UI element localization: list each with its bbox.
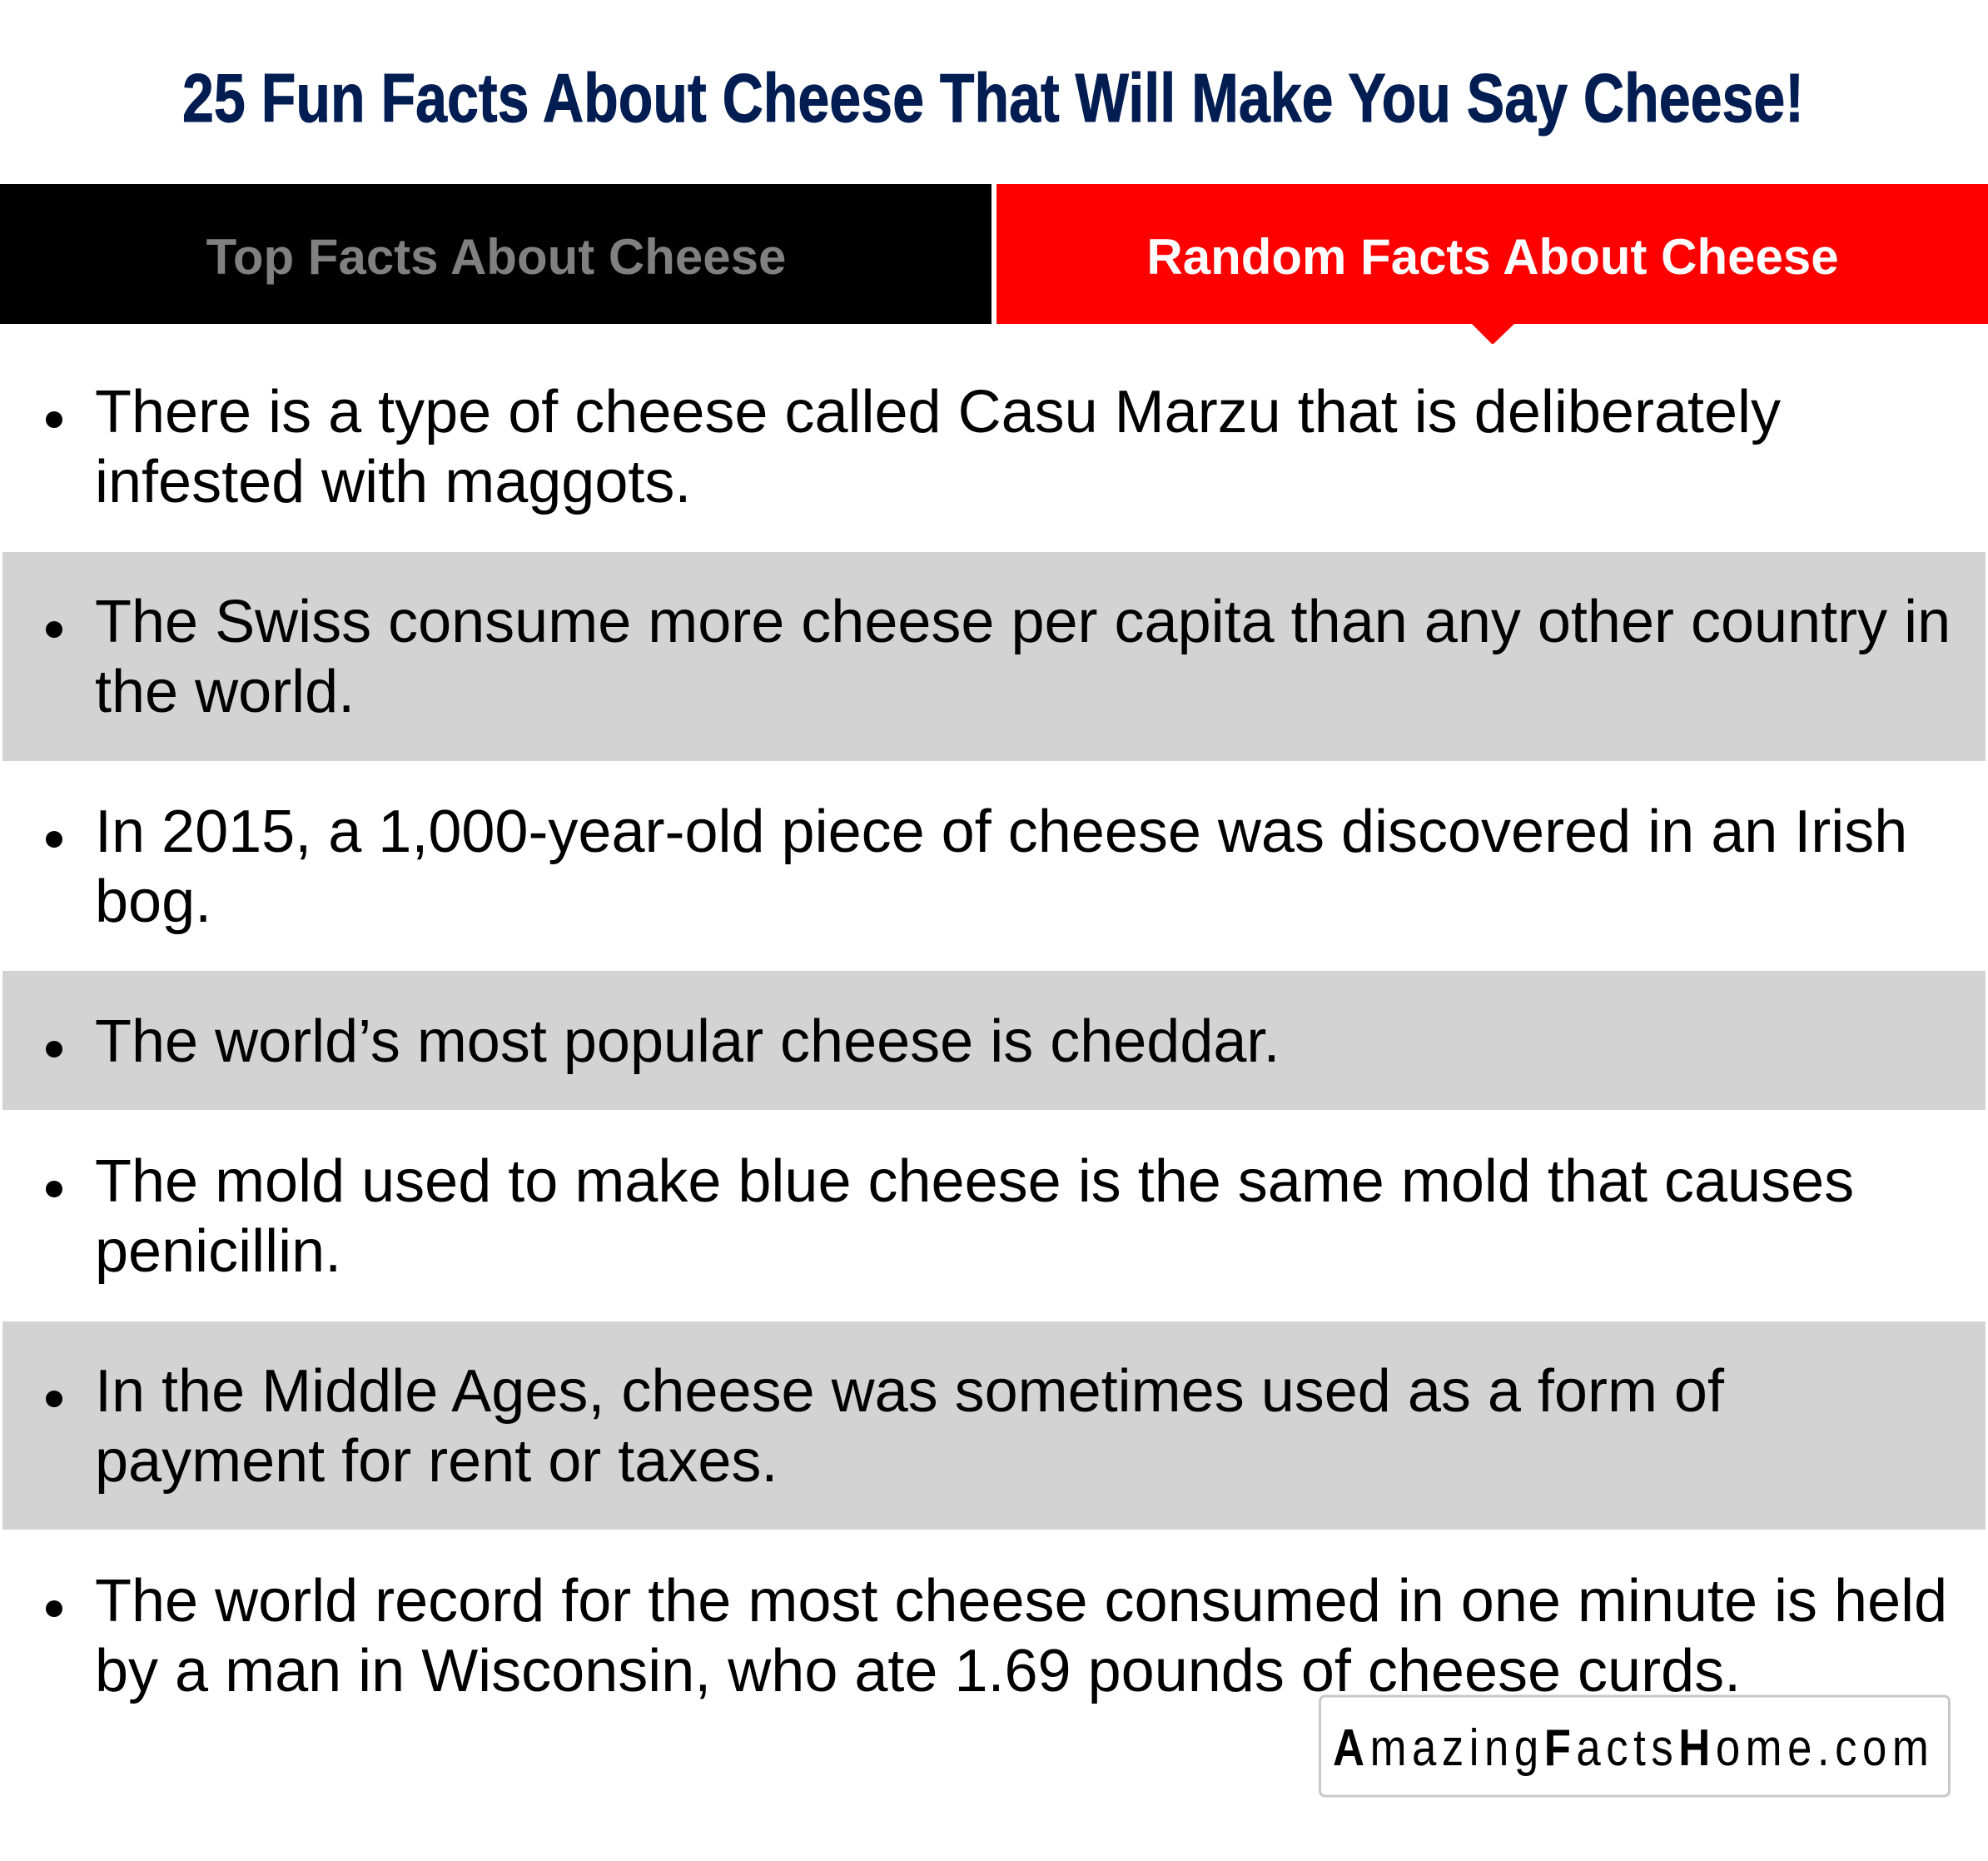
fact row 1 <box>46 379 1781 515</box>
fact row 7 <box>46 1568 1947 1704</box>
facts list <box>2 379 1986 1704</box>
fact row 5 <box>46 1148 1854 1285</box>
tab bar <box>0 184 1988 344</box>
fact row 1: infested with maggots. <box>95 449 691 515</box>
fact row 2: The Swiss consume more cheese per capita than any other country in <box>95 589 1951 655</box>
fact row 7: by a man in Wisconsin, who ate 1.69 pounds of cheese curds. <box>95 1638 1741 1704</box>
watermark badge: AmazingFactsHome.com <box>1333 1719 1934 1777</box>
fact row 2: the world. <box>95 659 355 725</box>
fact row 5: penicillin. <box>95 1218 341 1285</box>
fact row 4: The world’s most popular cheese is cheddar. <box>95 1008 1280 1075</box>
tab: random facts (active) <box>996 184 1988 344</box>
fact row 1: There is a type of cheese called Casu Marzu that is deliberately <box>95 379 1781 445</box>
fact row 6 <box>2 1321 1986 1530</box>
tab: top facts: Top Facts About Cheese <box>206 229 786 285</box>
fact row 4 <box>2 971 1986 1110</box>
fact row 3: In 2015, a 1,000-year-old piece of cheese was discovered in an Irish <box>95 799 1907 865</box>
fact row 3 <box>46 799 1907 935</box>
fact row 5: The mold used to make blue cheese is the same mold that causes <box>95 1148 1854 1215</box>
tab: top facts <box>0 184 992 324</box>
fact row 7: The world record for the most cheese consumed in one minute is held <box>95 1568 1947 1635</box>
fact row 6: payment for rent or taxes. <box>95 1428 778 1495</box>
fact row 6: In the Middle Ages, cheese was sometimes used as a form of <box>95 1358 1725 1425</box>
fact row 3: bog. <box>95 868 211 935</box>
tab: random facts (active): Random Facts About Cheese <box>1146 229 1839 285</box>
watermark badge <box>1320 1696 1950 1796</box>
fact row 2 <box>2 552 1986 761</box>
